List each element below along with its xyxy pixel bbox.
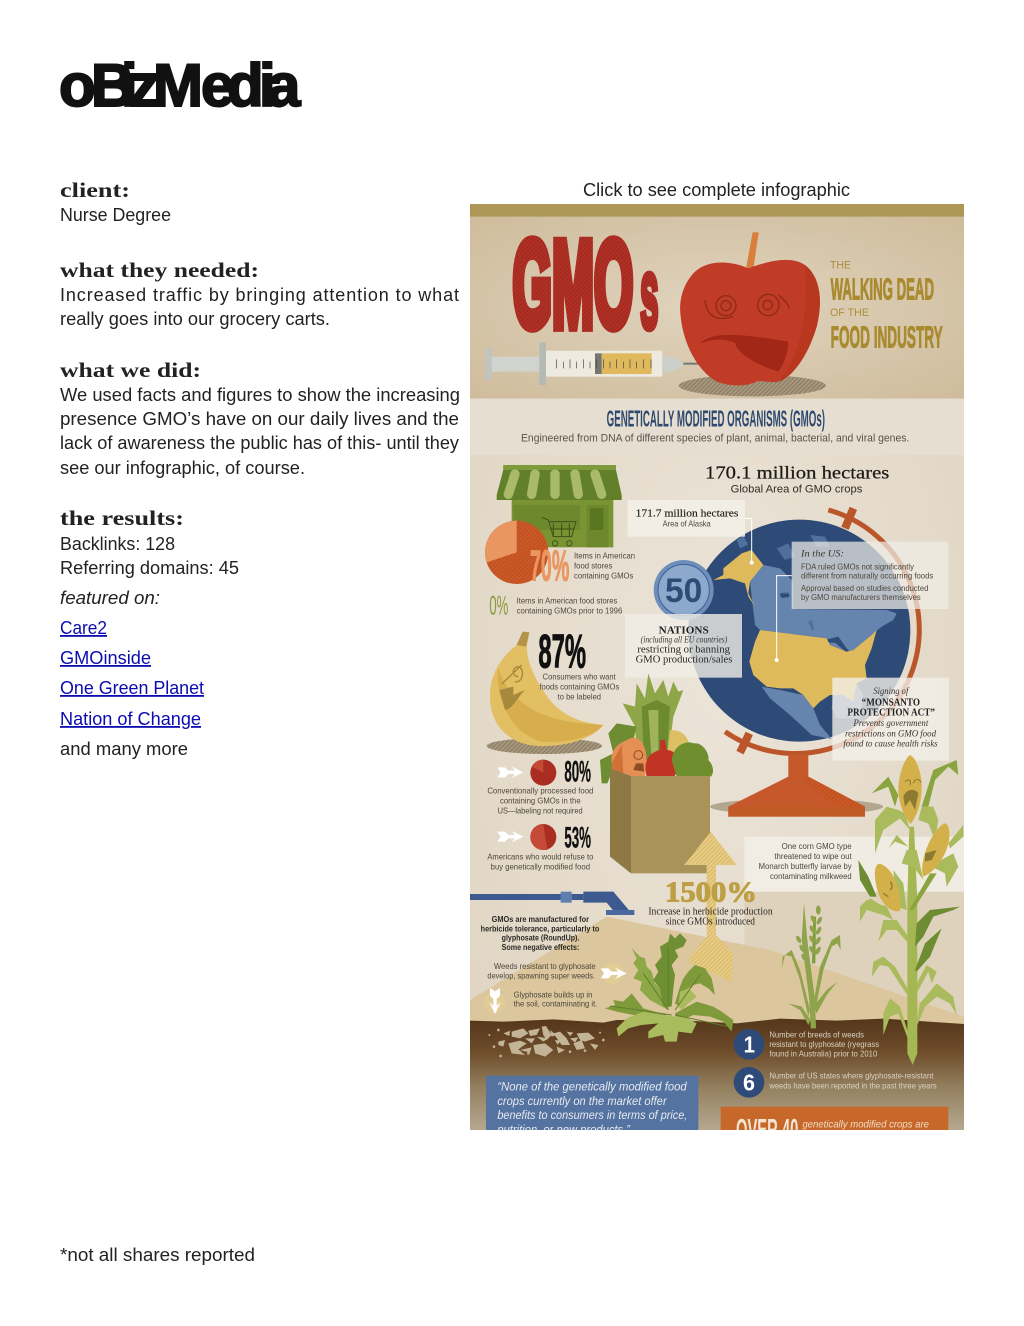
text: super weeds: Weeds resistant to glyphosate bbox=[494, 961, 596, 971]
arrow: to weeds bbox=[601, 963, 627, 984]
text: soil: the soil, contaminating it. bbox=[514, 999, 597, 1009]
text block: what we did: what we did: bbox=[60, 358, 201, 382]
text block: the results: Backlinks: 128 bbox=[60, 534, 175, 554]
text block: the results: GMOinside bbox=[60, 648, 151, 668]
orange panel: over 40 crops bbox=[721, 1107, 948, 1147]
stat: 53 percent bbox=[487, 822, 593, 871]
stat: 80 percent: containing GMOs in the bbox=[500, 795, 581, 805]
light continents bbox=[750, 565, 897, 652]
text block: the results: Care2 bbox=[60, 618, 107, 638]
badge: 50 nations bbox=[654, 560, 714, 620]
icon: store bbox=[497, 465, 622, 547]
callout: Monsanto Protection Act: PROTECTION ACT” bbox=[847, 707, 935, 718]
text: herbicide production bbox=[648, 907, 773, 928]
text block: what we did: presence GMO’s have on our daily lives and the bbox=[60, 409, 459, 429]
bag bbox=[610, 768, 631, 873]
text block: the results bbox=[60, 506, 239, 759]
heading: global area bbox=[706, 466, 889, 495]
stat: 53 percent: buy genetically modified food bbox=[491, 861, 590, 871]
heading: global area: Global Area of GMO crops bbox=[731, 484, 862, 496]
text block: what we did bbox=[60, 358, 460, 478]
header panel bbox=[470, 203, 964, 455]
callout: Monsanto Protection Act: found to cause health risks bbox=[843, 739, 938, 750]
callout: in the US: by GMO manufacturers themselves bbox=[801, 592, 921, 602]
soil bbox=[470, 1019, 964, 1130]
text block: the results: One Green Planet bbox=[60, 678, 204, 698]
arrow: herbicide increase bbox=[684, 832, 737, 982]
text: herbicide tolerance: herbicide tolerance, particularly to bbox=[481, 923, 599, 933]
globe base bbox=[710, 755, 883, 817]
logo: oBizMedia: oBizMedia bbox=[59, 52, 301, 119]
section: store and globe: 70% bbox=[530, 542, 569, 590]
section: lower illustration bbox=[470, 673, 964, 1147]
stat: 1 breed: found in Australia) prior to 2010 bbox=[769, 1049, 877, 1059]
text: herbicide production: since GMOs introduced bbox=[666, 917, 755, 928]
section: lower illustration: 80% bbox=[564, 756, 591, 789]
definition text: Engineered from DNA of different species of plant, animal, bacterial, and viral genes. bbox=[521, 433, 909, 445]
upper corn leaves and cobs bbox=[858, 755, 963, 911]
stat: 1 breed: resistant to glyphosate (ryegrass bbox=[769, 1039, 880, 1049]
lower corn leaves bbox=[860, 900, 960, 1040]
callout: Monsanto Protection Act: “MONSANTO bbox=[862, 698, 920, 709]
quote panel: nutrition, or new products.” bbox=[497, 1122, 631, 1136]
quote panel: crops currently on the market offer bbox=[497, 1094, 668, 1108]
header panel: GMO bbox=[513, 215, 633, 352]
top band bbox=[470, 203, 964, 217]
callout: in the US: Approval based on studies conducted bbox=[801, 583, 928, 593]
definition band bbox=[470, 399, 964, 455]
text: prior to 1996: containing GMOs prior to 1996 bbox=[517, 605, 622, 615]
text block: client: client: bbox=[60, 178, 130, 202]
text: consumers: foods containing GMOs bbox=[539, 681, 620, 691]
stat: 1 breed: 1 bbox=[744, 1032, 755, 1058]
callout: in the US: FDA ruled GMOs not significantly bbox=[801, 561, 915, 571]
section: store and globe: 0% bbox=[489, 590, 508, 620]
apple shadow bbox=[679, 375, 826, 396]
subtitle: OF THE bbox=[830, 307, 869, 319]
stat: 1500 percent: 1500% bbox=[665, 878, 757, 909]
callout: Monsanto Protection Act bbox=[832, 678, 949, 761]
section: store and globe bbox=[485, 462, 949, 817]
text: items in stores: food stores bbox=[574, 561, 613, 571]
text block: the results: and many more bbox=[60, 739, 188, 759]
icon: pipe bbox=[470, 892, 634, 915]
callout: nations: (including all EU countries) bbox=[641, 634, 727, 645]
text block: client bbox=[60, 178, 171, 225]
stat: 1 breed: Number of breeds of weeds bbox=[769, 1029, 865, 1039]
quote panel: benefits to consumers in terms of price, bbox=[497, 1108, 687, 1122]
text: prior to 1996: Items in American food stores bbox=[517, 595, 618, 605]
text block: what they needed: what they needed: bbox=[60, 258, 259, 282]
panel: GMO infographic bbox=[470, 203, 964, 1147]
icon: corn bbox=[858, 755, 963, 1065]
orange panel: over 40 crops: genetically modified crops are bbox=[802, 1120, 929, 1131]
stat: 80 percent: Conventionally processed food bbox=[487, 785, 593, 795]
header panel: s bbox=[640, 238, 659, 350]
stat: 80 percent bbox=[487, 756, 593, 815]
subtitle: THE bbox=[830, 259, 851, 271]
text: herbicide tolerance: glyphosate (RoundUp). bbox=[502, 933, 579, 943]
heading: global area: 170.1 million hectares bbox=[705, 462, 889, 482]
text block: client: Nurse Degree bbox=[60, 205, 171, 225]
text: super weeds: develop, spawning super weeds. bbox=[487, 970, 595, 980]
footnote: *not all shares reported bbox=[60, 1245, 255, 1265]
text: super weeds bbox=[487, 961, 596, 980]
subtitle bbox=[830, 259, 943, 355]
callout: Monsanto Protection Act: Prevents government bbox=[852, 719, 929, 729]
text block: the results: featured on: bbox=[60, 588, 160, 608]
arrow: to soil bbox=[484, 988, 506, 1014]
callout: corn milkweed: threatened to wipe out bbox=[774, 851, 852, 861]
infographic caption: Click to see complete infographic bbox=[583, 180, 850, 200]
stat: 1 breed bbox=[734, 1029, 880, 1060]
orange panel: over 40 crops: OVER 40 bbox=[736, 1113, 798, 1147]
sand hills bbox=[470, 892, 964, 1027]
icon: weed plant bbox=[605, 933, 733, 1042]
text block: what they needed: really goes into our grocery carts. bbox=[60, 309, 330, 329]
callout: in the US bbox=[775, 542, 948, 662]
icon: banana bbox=[490, 632, 603, 746]
quote panel: “None of the genetically modified food bbox=[497, 1079, 687, 1093]
callout: in the US: In the US: bbox=[800, 550, 844, 560]
globe bbox=[688, 520, 910, 742]
callout: nations: restricting or banning bbox=[637, 645, 730, 656]
globe stand arc bbox=[725, 508, 919, 754]
callout: corn milkweed bbox=[744, 837, 964, 892]
badge: 50 nations: 50 bbox=[665, 572, 702, 610]
text: herbicide tolerance: Some negative effects: bbox=[502, 942, 579, 952]
stat: 6 states: weeds have been reported in the past three years bbox=[768, 1080, 937, 1090]
text: herbicide production: Increase in herbicide production bbox=[648, 907, 773, 918]
text: items in stores bbox=[574, 551, 635, 580]
stat: 6 states: 6 bbox=[743, 1070, 755, 1096]
stat: 6 states bbox=[734, 1067, 937, 1098]
callout: Alaska bbox=[628, 500, 754, 565]
text block: the results: Referring domains: 45 bbox=[60, 558, 239, 578]
text: prior to 1996 bbox=[516, 598, 622, 615]
text block: what we did: see our infographic, of course. bbox=[60, 458, 305, 478]
text block: what they needed: Increased traffic by bringing attention to what bbox=[60, 285, 459, 305]
stat: 80 percent: US—labeling not required bbox=[498, 805, 583, 815]
text: consumers: to be labeled bbox=[558, 691, 601, 701]
gravel bbox=[488, 1026, 605, 1057]
stat: 53 percent: Americans who would refuse to bbox=[487, 851, 593, 861]
carrot and squash bbox=[667, 730, 690, 760]
quote panel bbox=[486, 1076, 698, 1136]
broccoli bbox=[672, 742, 713, 777]
callout: nations: NATIONS bbox=[659, 625, 709, 636]
callout: nations: GMO production/sales bbox=[636, 655, 732, 666]
leafy greens left bbox=[600, 723, 637, 783]
text block: what they needed bbox=[60, 258, 459, 329]
USA bbox=[749, 630, 877, 708]
title: GMOs bbox=[512, 235, 658, 333]
text block: what we did: We used facts and figures to show the increasing bbox=[60, 385, 460, 405]
text: consumers: Consumers who want bbox=[543, 671, 616, 681]
icon: grocery bag with vegetables bbox=[600, 673, 713, 873]
callout: Monsanto Protection Act: Signing of bbox=[873, 686, 910, 697]
text block: the results: Nation of Change bbox=[60, 709, 201, 729]
icon: apple bbox=[680, 232, 820, 385]
icon: syringe bbox=[486, 342, 712, 385]
stat: 6 states: Number of US states where glyphosate-resistant bbox=[769, 1071, 934, 1081]
stat: 87 percent: 87% bbox=[538, 625, 586, 678]
text: herbicide tolerance bbox=[481, 914, 599, 952]
Alaska bbox=[713, 550, 763, 607]
text block: what we did: lack of awareness the public has of this- until they bbox=[60, 433, 459, 453]
callout: Monsanto Protection Act: restrictions on GMO food bbox=[845, 728, 936, 739]
icon: wheat bbox=[782, 903, 841, 1028]
callout: Alaska: Area of Alaska bbox=[663, 519, 711, 529]
text: consumers bbox=[540, 674, 620, 700]
callout: Alaska: 171.7 million hectares bbox=[636, 509, 738, 520]
text: herbicide tolerance: GMOs are manufactured for bbox=[492, 914, 590, 924]
celery bbox=[622, 674, 684, 750]
callout: in the US: different from naturally occurring foods bbox=[801, 570, 934, 580]
text: soil bbox=[514, 989, 597, 1009]
callout: corn milkweed: One corn GMO type bbox=[782, 841, 852, 851]
text block: the results: the results: bbox=[60, 506, 184, 530]
red pepper bbox=[645, 740, 678, 781]
text: items in stores: Items in American bbox=[574, 551, 635, 561]
text: soil: Glyphosate builds up in bbox=[514, 989, 592, 999]
section: lower illustration: 53% bbox=[564, 822, 591, 855]
banana shadow bbox=[487, 738, 602, 754]
pie: 70 percent bbox=[485, 521, 548, 584]
callout: nations bbox=[625, 614, 742, 678]
callout: corn milkweed: contaminating milkweed bbox=[770, 871, 852, 881]
callout: corn milkweed: Monarch butterfly larvae by bbox=[759, 861, 852, 871]
text: items in stores: containing GMOs bbox=[574, 570, 634, 580]
